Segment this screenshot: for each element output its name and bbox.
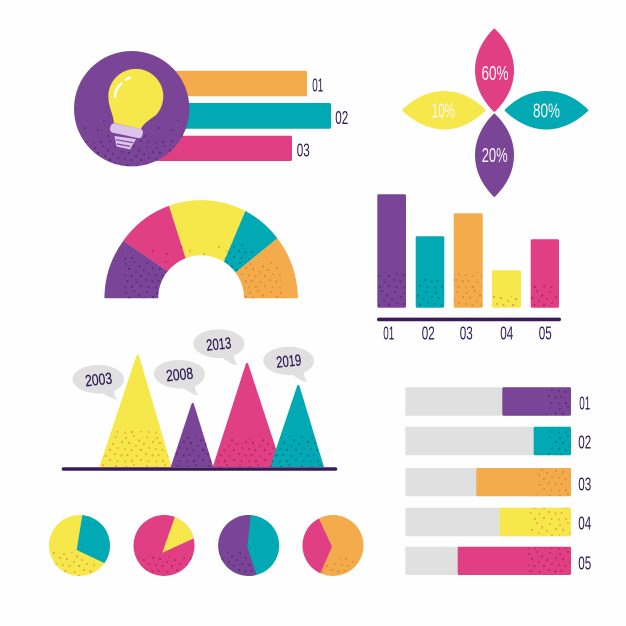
petal 10% yellow [402,91,486,130]
segment purple [104,241,168,298]
triangle yellow 2003 [99,354,172,467]
axis labels: 05 [539,323,552,343]
label 02: 02 [335,108,348,128]
axis labels: 03 [460,323,473,343]
chart: pie 3 purple and teal [218,515,280,576]
bar 01 purple [377,194,406,308]
bar 02 teal [170,103,331,129]
speckle texture on triangles [100,431,323,467]
chart: pie 4 orange and pink [302,515,364,576]
chart: vertical bars [377,194,561,343]
speech bubble 2019: 2019 [276,352,302,372]
chart: semicircle gauge [104,200,298,298]
row 02: 02 [578,433,591,453]
axis labels: 02 [422,323,435,343]
panel: light bulb bar list [74,51,348,168]
bar 01 orange [170,71,307,96]
axis line [377,318,561,321]
row 04 [405,508,591,536]
petal 10% yellow: 10% [432,100,455,122]
speech bubble 2008 [154,360,205,396]
speckle texture on gauge [122,240,284,298]
axis labels: 01 [383,323,394,343]
petal 80% teal: 80% [533,100,560,122]
row 03: 03 [578,474,591,494]
row 01: 01 [579,394,590,414]
petal 20% purple [475,113,514,197]
segment pink [123,206,186,271]
row 05: 05 [578,554,591,574]
row 03 [405,468,591,496]
bar 02 teal [416,236,444,308]
speech bubble 2019 [263,347,314,382]
bar 05 pink [531,239,559,308]
petal 80% teal [504,91,589,130]
row 05 [405,547,591,575]
icon: purple circle with light bulb [74,51,190,168]
chart: horizontal progress bars [405,387,591,575]
speech bubble 2003: 2003 [84,371,113,390]
panel: percentage petals [402,28,589,197]
axis labels: 04 [500,323,513,343]
petal 60% pink: 60% [482,63,509,85]
row 04: 04 [578,514,591,534]
segment teal [224,211,277,272]
row 01 [405,387,590,416]
triangle pink 2013 [213,363,282,467]
row 02 [405,427,591,455]
petal 20% purple: 20% [482,145,508,167]
segment yellow [169,200,245,262]
bar 04 yellow [492,270,521,308]
speech bubble 2003 [73,365,124,400]
chart: pie 1 yellow and teal [49,515,110,576]
triangle teal 2019 [270,385,324,467]
chart: triangle timeline [62,329,337,471]
speckle texture on bars [378,272,558,307]
label 01: 01 [312,76,323,96]
speech bubble 2013 [193,329,244,366]
bar 03 pink [150,136,292,161]
axis line [62,467,337,471]
axis labels [383,323,552,343]
label 03: 03 [297,141,310,161]
segment orange [236,238,298,298]
bar 03 orange [454,213,483,308]
chart: pie 2 pink and yellow [134,515,194,576]
speech bubble 2008: 2008 [165,366,194,385]
speech bubble 2013: 2013 [206,335,232,355]
petal 60% pink [475,28,514,112]
triangle purple 2008 [171,403,213,467]
